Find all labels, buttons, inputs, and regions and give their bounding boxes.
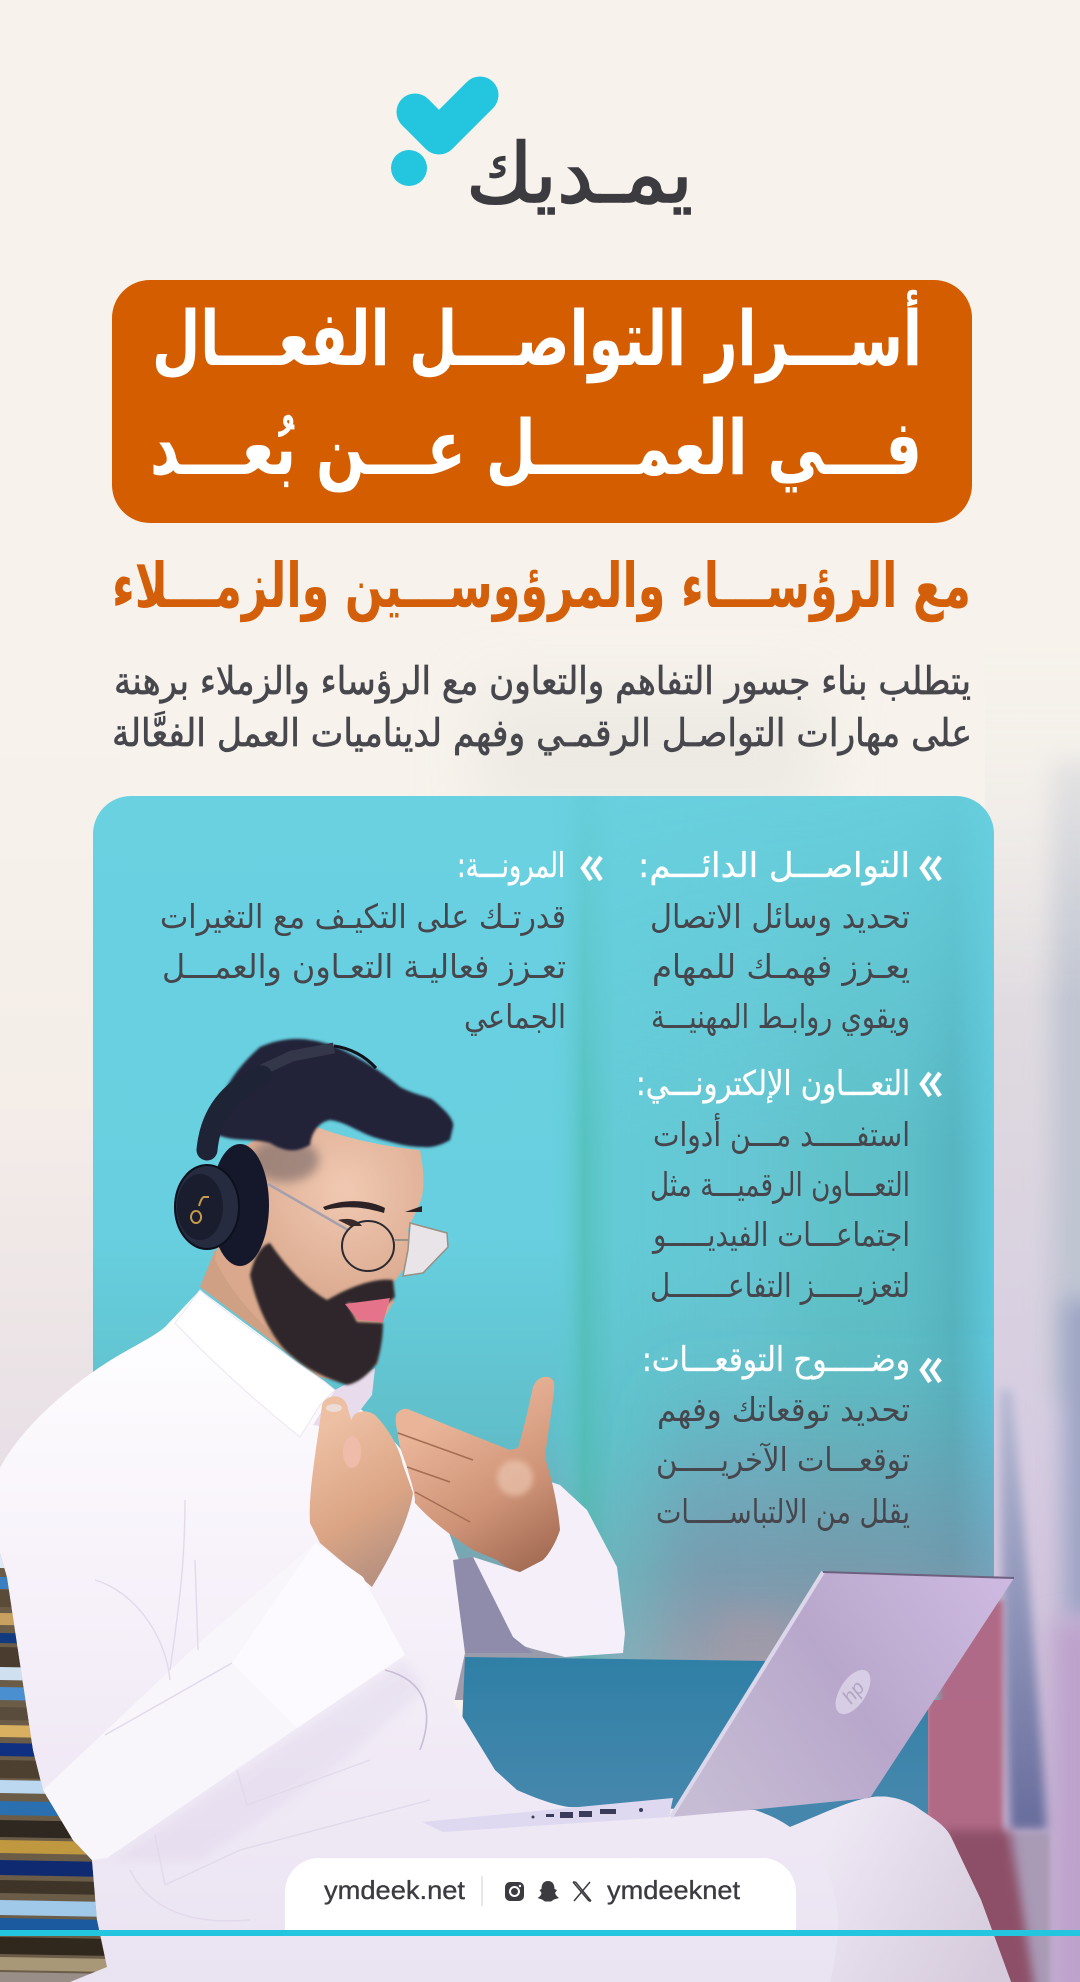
laptop lid [671, 1572, 1014, 1817]
cup face [177, 1174, 223, 1240]
thin headband [262, 1048, 334, 1070]
footer pill [285, 1858, 796, 1930]
logo wordmark: يمـديك [466, 127, 693, 222]
body text: استفـــــد مـــن أدوات [653, 1113, 910, 1154]
brand mark [191, 1197, 209, 1223]
headband pad [207, 1076, 262, 1150]
neck [200, 1250, 330, 1385]
intro text: يتطلب بناء جسور التفاهم والتعاون مع الرؤساء والزملاء برهنة [114, 659, 971, 704]
section: continuous communication [638, 846, 940, 1036]
thumb nail [326, 1404, 342, 1412]
eyebrow [323, 1201, 422, 1213]
body text: قدرتـك على التكيـف مع التغيرات [160, 897, 566, 936]
cuff [232, 1543, 405, 1728]
body text: ويقوي روابـط المهنيـــة [651, 997, 910, 1036]
ports [532, 1808, 643, 1818]
right hand [396, 1377, 560, 1572]
section: flexibility [160, 846, 601, 1036]
logo [391, 95, 693, 222]
glasses [268, 1184, 448, 1276]
collar [175, 1290, 335, 1437]
sofa backrest [455, 1657, 928, 1890]
laptop base [422, 1798, 673, 1832]
face [215, 1126, 423, 1383]
lips [345, 1298, 390, 1322]
finger gaps [398, 1433, 473, 1522]
icon: double chevron [922, 1073, 940, 1096]
heading: وضـــــوح التوقعـــات: [642, 1340, 910, 1380]
knuckle highlight [497, 1460, 533, 1496]
body text: تحديد وسائل الاتصال [650, 897, 910, 936]
icon: instagram [505, 1882, 524, 1901]
intro text: على مهارات التواصـل الرقمـي وفهم لديناميات العمل الفعَّالة [112, 711, 972, 756]
eye [338, 1219, 362, 1226]
left hand [310, 1396, 413, 1587]
body text: التعـــاون الرقميـــة مثل [650, 1165, 910, 1204]
icon: double chevron [583, 857, 601, 880]
heading: التواصـــل الدائـــم: [638, 846, 910, 886]
hp logo [828, 1664, 878, 1720]
blurred curtain backdrop [0, 640, 1080, 1982]
body text: يقلل من الالتباســـــات [656, 1492, 910, 1531]
bottom accent line [0, 1930, 1080, 1936]
section: e-collaboration [636, 1064, 940, 1305]
man in white thobe [0, 1039, 1011, 1982]
body text: يعـزز فهمـك للمهام [652, 947, 910, 986]
hair fade [251, 1138, 319, 1182]
panel: teal background [93, 796, 1060, 1710]
forearm shadow [110, 1660, 425, 1862]
shirt body [0, 1290, 1011, 1982]
right sleeve [473, 1480, 625, 1657]
thigh shading [790, 1797, 1011, 1982]
hp logo: hp [838, 1677, 869, 1708]
glasses temple [268, 1184, 348, 1230]
laptop [422, 1572, 1014, 1832]
icon: check mark [415, 95, 480, 136]
left lens [342, 1221, 394, 1271]
body text [160, 897, 566, 1036]
headphones [175, 1046, 376, 1266]
curled fingers [343, 1436, 361, 1468]
body text [650, 1113, 910, 1305]
body text: تحديد توقعاتك وفهم [657, 1390, 910, 1429]
lid edge [671, 1572, 823, 1817]
icon: double chevron [922, 1359, 940, 1382]
intro text [112, 659, 972, 756]
left forearm [43, 1543, 405, 1860]
body text [650, 897, 910, 1036]
handle: ymdeeknet [607, 1875, 741, 1905]
heading: المرونـــة: [457, 846, 565, 886]
icon: logo dot [391, 150, 427, 186]
icon: double chevron [922, 857, 940, 880]
section: clear expectations [642, 1340, 940, 1531]
icon: snapchat [538, 1881, 559, 1902]
shirt opening [313, 1368, 375, 1430]
title banner [112, 280, 972, 523]
icon: X [573, 1882, 591, 1901]
sleeve shadow [453, 1557, 533, 1653]
ear pad [211, 1144, 269, 1266]
body text: اجتماعـــات الفيديـــــو [651, 1215, 910, 1254]
striped pillow [0, 1554, 107, 1982]
shirt fold lines [95, 1500, 430, 1921]
body text: الجماعي [464, 997, 566, 1036]
body text [656, 1390, 910, 1531]
body text: تعـزز فعاليـة التعـاون والعمـــل [162, 947, 566, 986]
hair [217, 1039, 453, 1150]
right lens [403, 1223, 448, 1276]
ear cup [175, 1165, 239, 1249]
body text: لتعزيـــــز التفاعـــــــل [650, 1266, 910, 1305]
body text: توقعـــات الآخريـــــن [656, 1440, 910, 1479]
website: ymdeek.net [324, 1875, 466, 1905]
heading: التعـــاون الإلكترونـــي: [636, 1064, 910, 1104]
beard [250, 1243, 395, 1385]
